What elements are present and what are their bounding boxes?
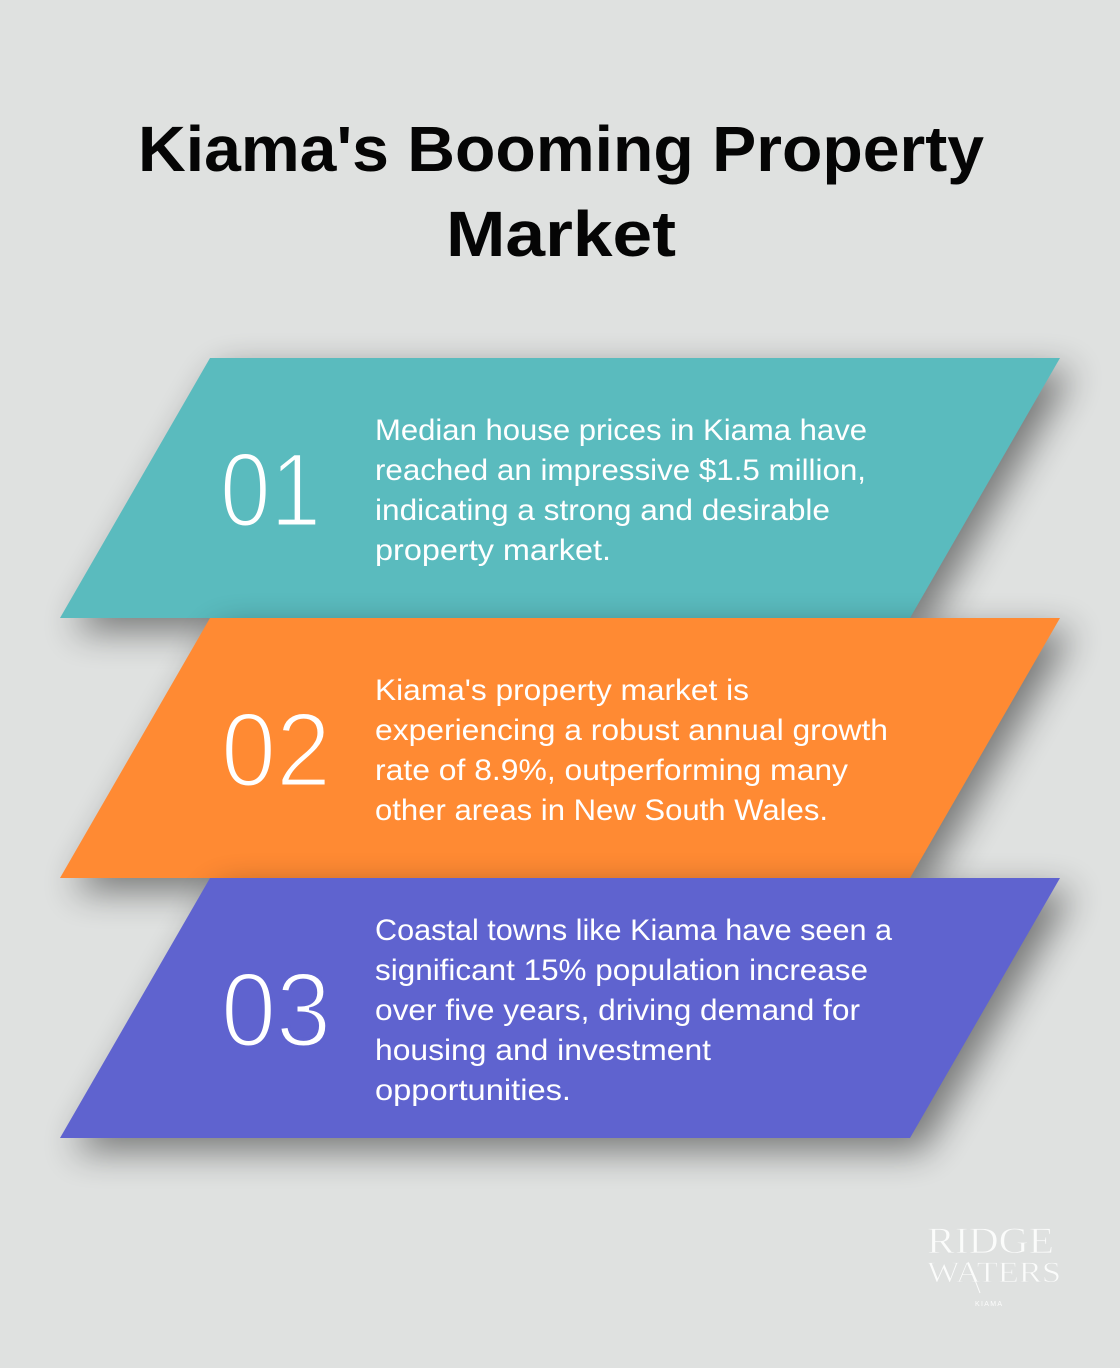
panel: 02 annual growth: [60, 618, 1060, 878]
text block 02: [375, 674, 888, 827]
text block 03: [375, 914, 892, 1107]
text block 01: Median house prices in Kiama have: [375, 414, 867, 447]
logo: Ridge Waters Kiama: RIDGE: [927, 1221, 1054, 1262]
logo: Ridge Waters Kiama: WATERS: [927, 1256, 1061, 1289]
number 03: 03: [221, 952, 331, 1069]
text block 03: housing and investment: [375, 1034, 712, 1067]
number 02: 02: [221, 692, 331, 809]
title: Kiama's Booming Property: [138, 113, 984, 185]
text block 03: over five years, driving demand for: [375, 994, 860, 1027]
text block 02: Kiama's property market is: [375, 674, 749, 707]
title: Market: [446, 198, 676, 270]
teal parallelogram: [60, 358, 1060, 618]
text block 01: [375, 414, 867, 567]
text block 03: opportunities.: [375, 1074, 571, 1107]
panel: 01 median house prices: [60, 358, 1060, 618]
text block 02: rate of 8.9%, outperforming many: [375, 754, 848, 787]
logo: Ridge Waters Kiama: [927, 1221, 1061, 1308]
text block 03: significant 15% population increase: [375, 954, 868, 987]
number 01: 01: [220, 432, 321, 549]
purple parallelogram: [60, 878, 1060, 1138]
text block 02: other areas in New South Wales.: [375, 794, 828, 827]
text block 01: indicating a strong and desirable: [375, 494, 830, 527]
panel: 03 population increase: [60, 878, 1060, 1138]
text block 01: reached an impressive $1.5 million,: [375, 454, 866, 487]
text block 01: property market.: [375, 534, 611, 567]
text block 03: Coastal towns like Kiama have seen a: [375, 914, 892, 947]
logo: Ridge Waters Kiama: KIAMA: [975, 1301, 1002, 1308]
text block 02: experiencing a robust annual growth: [375, 714, 888, 747]
orange parallelogram: [60, 618, 1060, 878]
title: [138, 113, 984, 270]
